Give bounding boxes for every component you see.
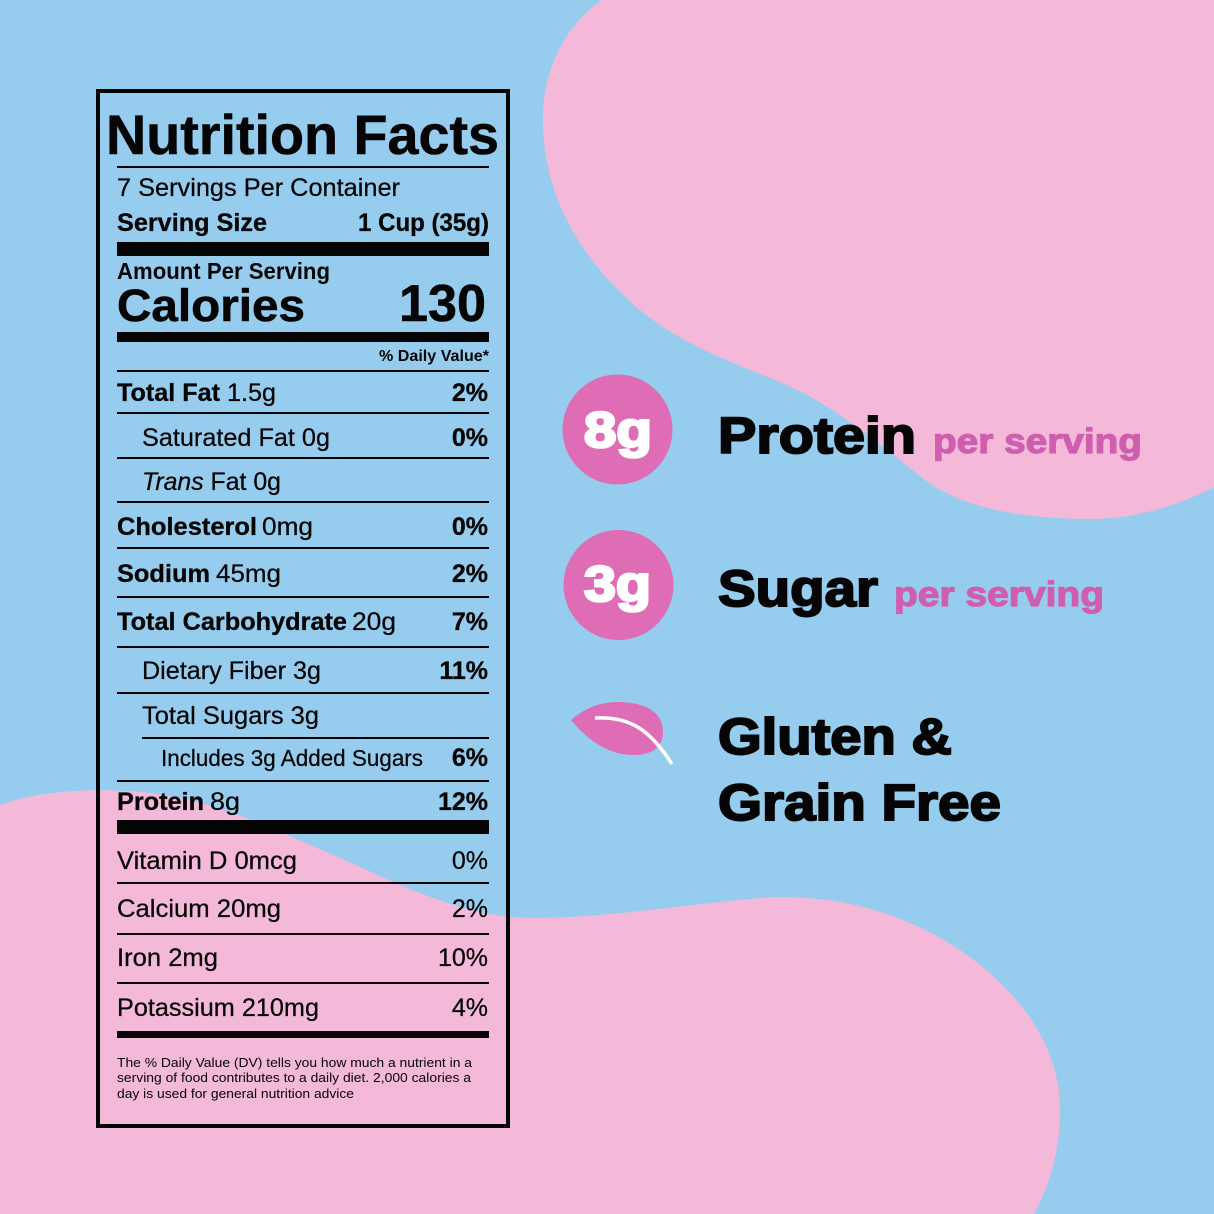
footnote: serving of food contributes to a daily diet. 2,000 calories a: [117, 1070, 472, 1085]
daily value header: % Daily Value*: [379, 348, 490, 365]
row: total carbohydrate: 7%: [452, 608, 488, 636]
calories: Calories: [117, 280, 305, 331]
row: sodium: [117, 560, 488, 588]
row: dietary fiber: Dietary Fiber 3g: [142, 657, 321, 685]
row: sodium: 2%: [452, 560, 488, 588]
row: total fat: Total Fat: [117, 379, 221, 407]
calories: Amount Per Serving: [117, 258, 330, 284]
servings: 1 Cup (35g): [358, 209, 489, 237]
servings: Serving Size: [117, 209, 267, 237]
row: saturated fat: [142, 424, 488, 452]
protein badge: [562, 374, 672, 484]
sugar badge: 3g: [584, 556, 651, 612]
row: cholesterol: Cholesterol: [117, 513, 257, 541]
label title: Nutrition Facts: [106, 103, 499, 166]
gluten and grain free heading: Grain Free: [718, 774, 1001, 831]
row: sodium: 45mg: [216, 560, 281, 588]
footnote: day is used for general nutrition advice: [117, 1086, 354, 1101]
gluten and grain free heading: Gluten &: [718, 708, 952, 765]
row: iron: 10%: [438, 944, 488, 972]
row: protein: [117, 788, 488, 816]
row: protein: 8g: [210, 788, 240, 816]
protein heading: [718, 407, 1142, 464]
row: saturated fat: 0%: [452, 424, 488, 452]
sugar badge: [564, 530, 674, 640]
row: protein: Protein: [117, 788, 204, 816]
nutrition facts label: [98, 91, 508, 1126]
protein badge: 8g: [584, 402, 652, 458]
row: vitamin d: Vitamin D 0mcg: [117, 847, 297, 875]
sugar heading: [718, 560, 1104, 617]
row: calcium: 2%: [452, 895, 488, 923]
row: iron: Iron 2mg: [117, 944, 218, 972]
row: potassium: Potassium 210mg: [117, 994, 319, 1022]
row: total fat: 2%: [452, 379, 488, 407]
row: sodium: Sodium: [117, 560, 210, 588]
bottom left pink blob: [0, 790, 1060, 1214]
row: total carbohydrate: 20g: [352, 608, 396, 636]
sugar heading: per serving: [894, 575, 1104, 614]
icon: leaf: [571, 702, 672, 764]
row: total carbohydrate: [117, 608, 488, 636]
row: cholesterol: 0%: [452, 513, 488, 541]
row: total fat: [117, 379, 488, 407]
row: cholesterol: 0mg: [262, 513, 313, 541]
servings: 7 Servings Per Container: [117, 174, 400, 202]
row: potassium: [117, 994, 488, 1022]
servings: [117, 174, 489, 237]
protein heading: per serving: [933, 422, 1142, 461]
row: calcium: [117, 895, 488, 923]
calories: [117, 258, 486, 333]
row: dietary fiber: [142, 657, 488, 685]
label border: [98, 91, 508, 1126]
gluten and grain free heading: [718, 708, 1001, 831]
row: vitamin d: 0%: [452, 847, 488, 875]
row: iron: [117, 944, 488, 972]
row: saturated fat: Saturated Fat 0g: [142, 424, 330, 452]
footnote: [117, 1055, 473, 1101]
calories: 130: [399, 275, 486, 333]
row: total sugars: Total Sugars 3g: [142, 702, 319, 730]
top right pink blob: [543, 0, 1214, 519]
protein heading: Protein: [718, 407, 916, 464]
row: potassium: 4%: [452, 994, 488, 1022]
row: total carbohydrate: Total Carbohydrate: [117, 608, 347, 636]
row: trans fat: Trans Fat 0g: [142, 468, 281, 496]
row: dietary fiber: 11%: [439, 657, 488, 685]
row: calcium: Calcium 20mg: [117, 895, 281, 923]
row: added sugars: 6%: [452, 744, 488, 772]
row: added sugars: Includes 3g Added Sugars: [161, 745, 423, 771]
footnote: The % Daily Value (DV) tells you how much a nutrient in a: [117, 1055, 473, 1070]
row: protein: 12%: [438, 788, 488, 816]
sugar heading: Sugar: [718, 560, 878, 617]
row: total fat: 1.5g: [227, 379, 276, 407]
row: cholesterol: [117, 513, 488, 541]
row: vitamin d: [117, 847, 488, 875]
